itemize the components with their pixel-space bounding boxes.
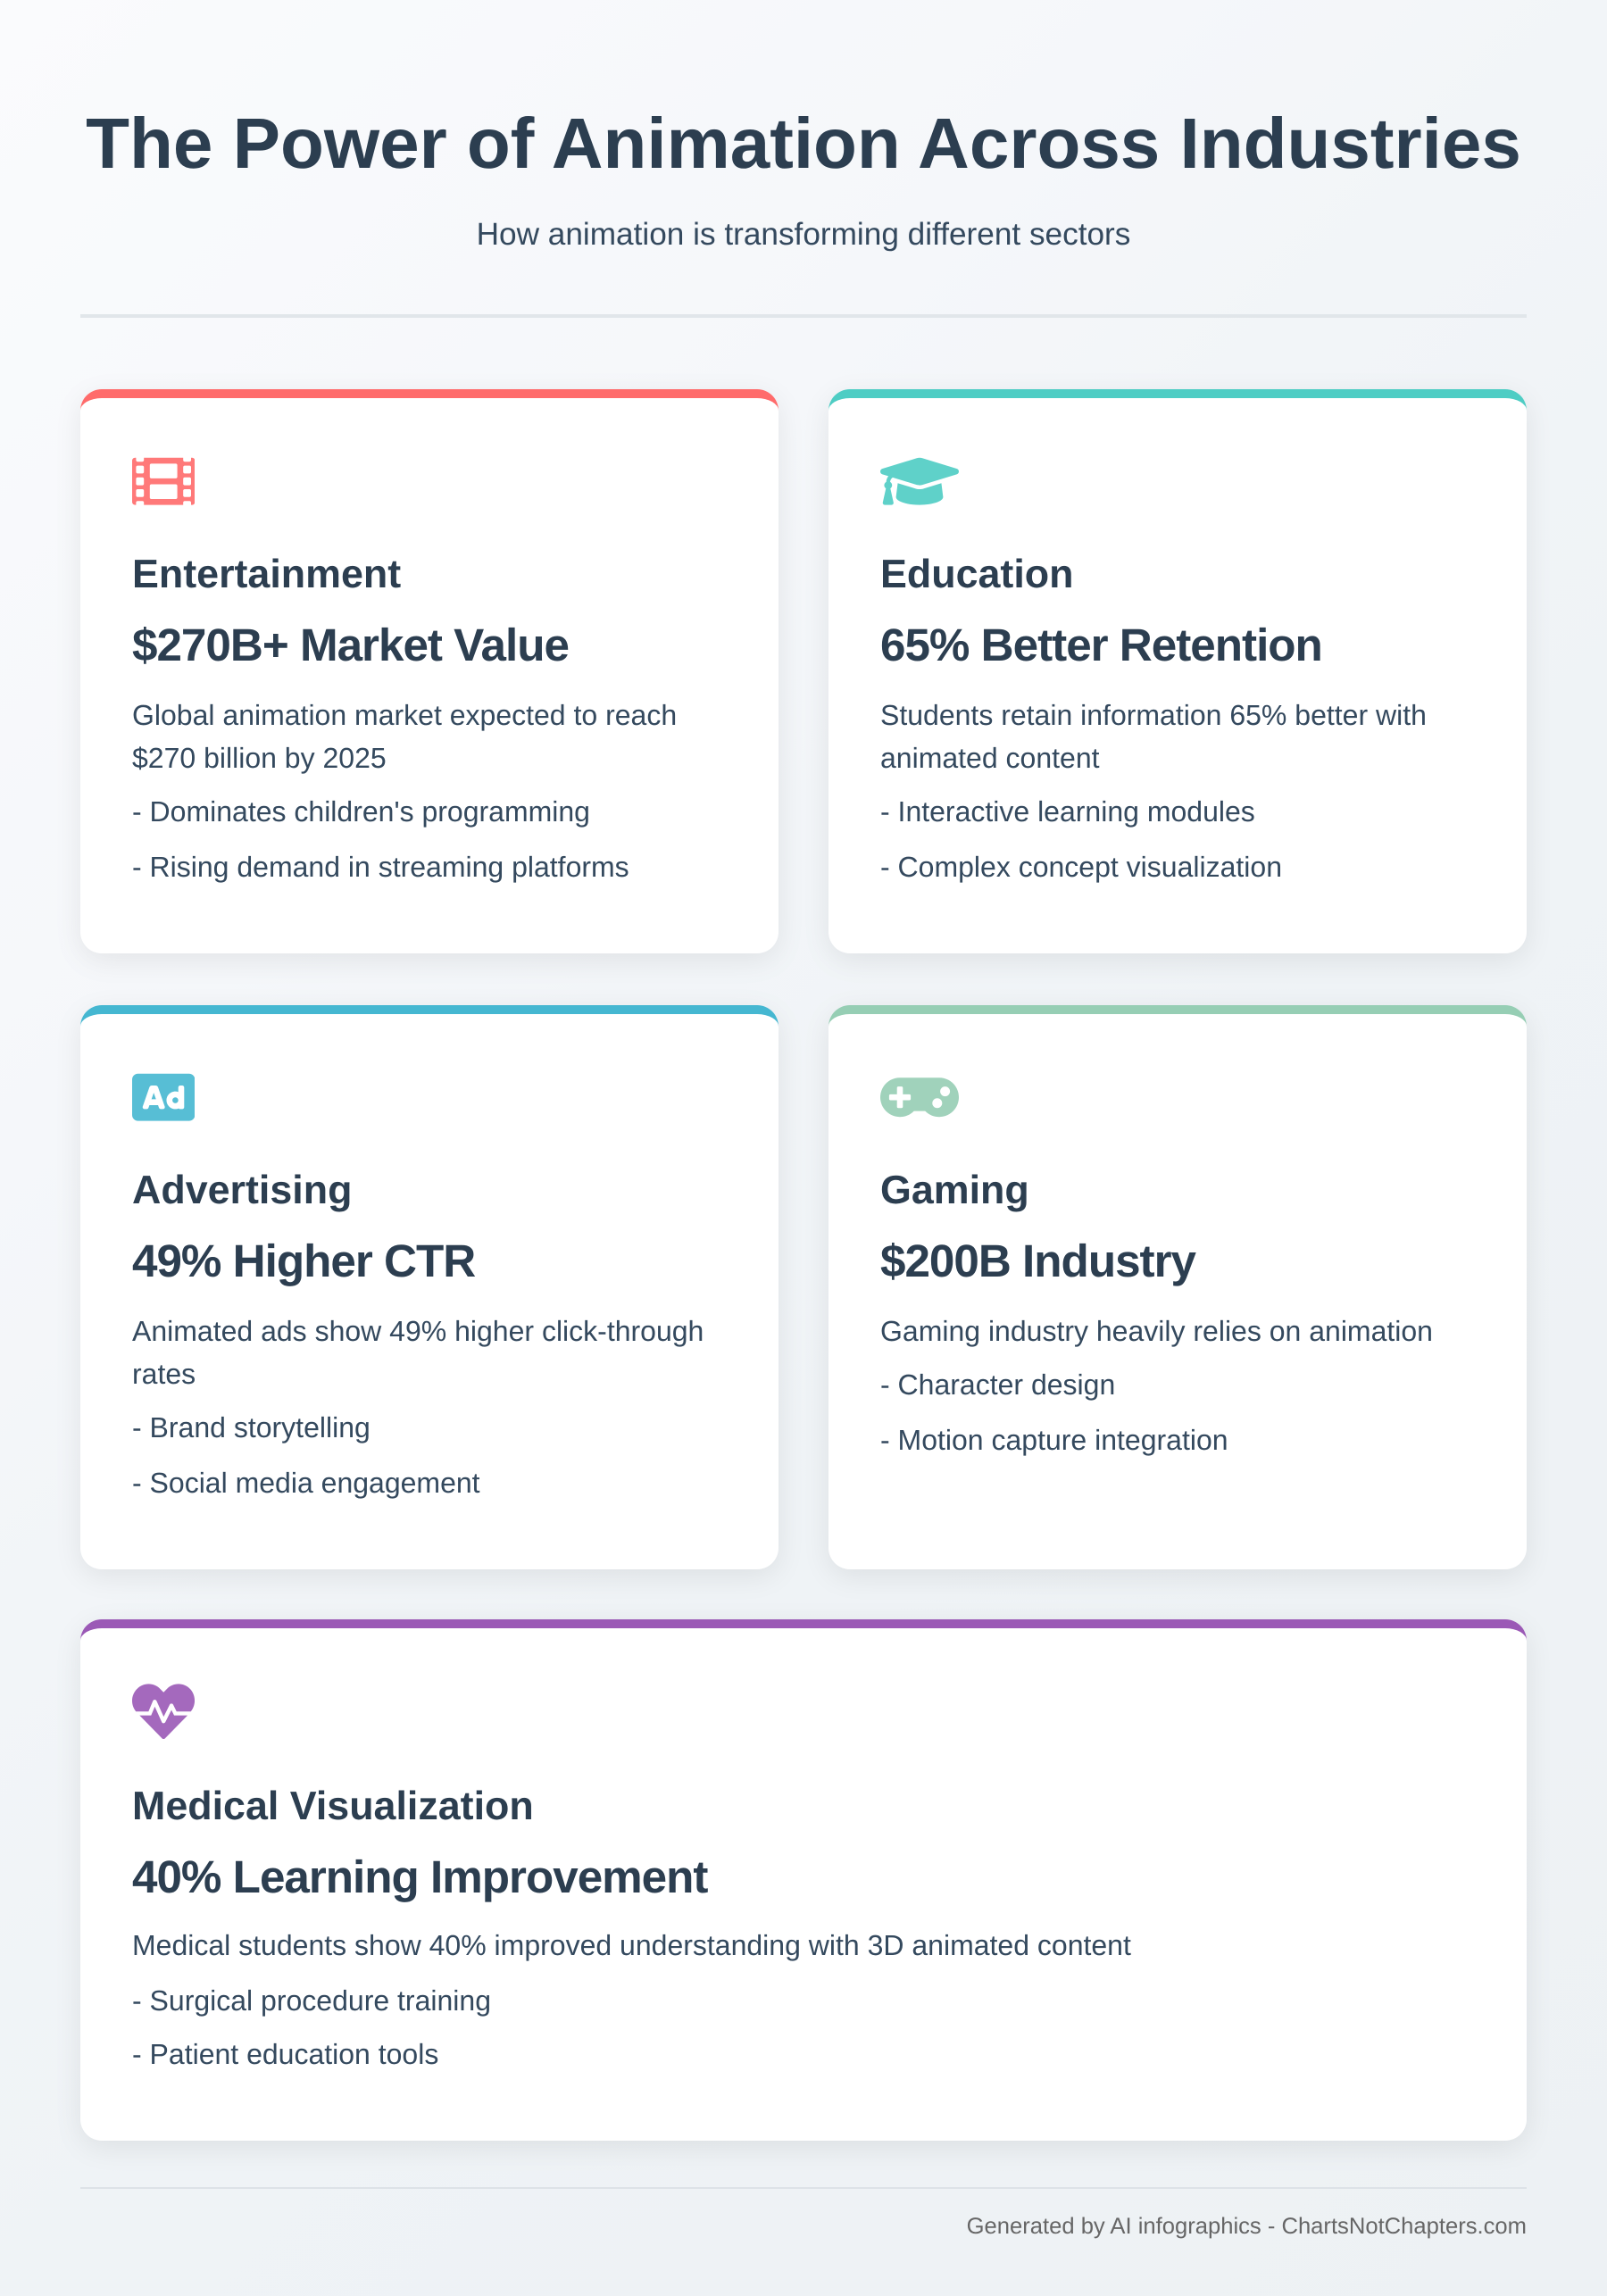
heading: Gaming xyxy=(880,1168,1029,1212)
icon: ad xyxy=(132,1073,195,1121)
description: Medical students show 40% improved understanding with 3D animated content xyxy=(132,1929,1131,1961)
title: The Power of Animation Across Industries xyxy=(86,104,1521,183)
stat: $200B Industry xyxy=(880,1235,1195,1285)
description: Global animation market expected to reach xyxy=(132,699,677,731)
description xyxy=(132,699,677,774)
panel: advertising xyxy=(80,1005,779,1569)
bullet: - Brand storytelling xyxy=(132,1411,371,1443)
bullet: - Dominates children's programming xyxy=(132,795,590,828)
description: Students retain information 65% better with xyxy=(880,699,1427,731)
stat: 49% Higher CTR xyxy=(132,1235,475,1285)
panel: education xyxy=(828,389,1527,953)
bullet: - Social media engagement xyxy=(132,1466,480,1498)
bullet: - Motion capture integration xyxy=(880,1423,1228,1455)
panel: medical visualization xyxy=(80,1619,1527,2141)
bullet: - Rising demand in streaming platforms xyxy=(132,850,629,882)
description xyxy=(880,699,1427,774)
icon: film xyxy=(132,457,195,505)
description xyxy=(132,1315,704,1390)
icon: graduation cap xyxy=(880,457,959,505)
panel: entertainment xyxy=(80,389,779,953)
description: $270 billion by 2025 xyxy=(132,742,387,774)
bullet: - Complex concept visualization xyxy=(880,850,1282,882)
stat: $270B+ Market Value xyxy=(132,620,569,670)
bullet: - Patient education tools xyxy=(132,2038,438,2070)
description: animated content xyxy=(880,742,1100,774)
heading: Education xyxy=(880,552,1074,596)
panel: gaming xyxy=(828,1005,1527,1569)
heading: Medical Visualization xyxy=(132,1784,534,1828)
heading: Advertising xyxy=(132,1168,352,1212)
subtitle: How animation is transforming different sectors xyxy=(477,217,1130,252)
heading: Entertainment xyxy=(132,552,401,596)
description: Gaming industry heavily relies on animation xyxy=(880,1315,1433,1347)
footer: Generated by AI infographics - ChartsNotChapters.com xyxy=(967,2214,1527,2239)
stat: 40% Learning Improvement xyxy=(132,1851,707,1901)
icon: gamepad xyxy=(880,1077,959,1118)
bullet: - Interactive learning modules xyxy=(880,795,1255,828)
icon: heartbeat xyxy=(132,1684,195,1739)
description: Animated ads show 49% higher click-through xyxy=(132,1315,704,1347)
bullet: - Surgical procedure training xyxy=(132,1984,491,2017)
description: rates xyxy=(132,1358,196,1390)
bullet: - Character design xyxy=(880,1368,1115,1401)
stat: 65% Better Retention xyxy=(880,620,1322,670)
